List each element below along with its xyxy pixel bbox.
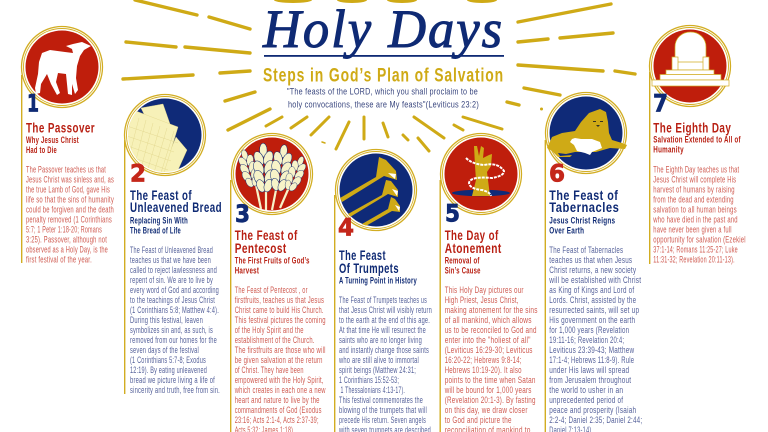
subheading: Replacing Sin With: [130, 216, 188, 226]
body text: His government on the earth: [549, 315, 635, 325]
number 7: 7: [653, 90, 668, 118]
body text: 17:1-4; Hebrews 11:8-9). Rule: [549, 355, 634, 365]
panel: The Feast of Trumpets: [335, 150, 432, 432]
body text: peace and prosperity (Isaiah: [549, 405, 636, 415]
title: Holy Days: Holy Days: [262, 0, 504, 59]
body text: 3:25). Passover, although not: [26, 234, 107, 244]
body text: to the earth at the end of this age.: [339, 315, 430, 325]
sun rays: [123, 0, 635, 151]
body text: [549, 245, 642, 432]
body text: This festival pictures the coming: [235, 315, 326, 325]
icon: unleavened bread: [115, 94, 206, 178]
number 4: 4: [338, 214, 354, 242]
body text: that Jesus Christ will visibly return: [339, 305, 432, 315]
heading: Of Trumpets: [339, 261, 399, 276]
heading: Unleavened Bread: [130, 200, 222, 215]
subheading: [445, 256, 481, 276]
panel: The Feast of Unleavened Bread: [115, 94, 222, 395]
body text: which creates in each one a new: [234, 385, 326, 395]
body text: teaches us that when Jesus: [549, 255, 633, 265]
panel: The Day of Atonement: [440, 134, 538, 432]
body text: 12:19). By eating unleavened: [130, 365, 207, 375]
number 1: 1: [27, 90, 39, 118]
subheading: The Bread of Life: [130, 226, 181, 236]
body text: will be established with Christ: [549, 275, 641, 285]
body text: heart and nature to live by the: [235, 395, 320, 405]
body text: first festival of the year.: [26, 254, 92, 264]
body text: The firstfruits are those who will: [235, 345, 326, 355]
body text: will be bound for 1,000 years: [444, 385, 532, 395]
body text: of all mankind, which allows: [445, 315, 532, 325]
body text: the true Lamb of God, gave His: [26, 184, 110, 194]
body text: [444, 285, 538, 432]
body text: enter into the "holiest of all": [445, 335, 531, 345]
body text: life so that the sins of humanity: [26, 194, 114, 204]
body text: on this day, we draw closer: [445, 405, 528, 415]
body text: [653, 164, 746, 264]
body text: empowered with the Holy Spirit,: [235, 375, 324, 385]
scripture quote: holy convocations, these are My feasts"(Leviticus 23:2): [288, 100, 479, 110]
body text: resurrected saints, will set up: [549, 305, 639, 315]
panel: The Eighth Day: [650, 26, 746, 264]
heading: Tabernacles: [549, 200, 619, 215]
icon: hand breaking chains: [440, 134, 522, 214]
body text: sincerity and truth, free from sin.: [130, 385, 220, 395]
icon: throne: [650, 26, 730, 106]
heading: The Feast of: [549, 188, 618, 203]
subheading: Jesus Christ Reigns: [549, 216, 615, 226]
body text: establishment of the Church.: [235, 335, 315, 345]
scripture quote: [287, 86, 479, 110]
body text: the world to usher in an: [549, 385, 623, 395]
subheading: [26, 135, 79, 155]
subheading: Removal of: [445, 256, 480, 266]
subheading: Had to Die: [26, 145, 57, 155]
body text: who are still alive to immortal: [338, 355, 419, 365]
number 5: 5: [445, 200, 460, 228]
heading: [549, 188, 619, 215]
body text: (1 Corinthians 5:8; Matthew 4:4).: [130, 305, 219, 315]
body text: could be forgiven and the death: [26, 204, 114, 214]
heading: [235, 228, 298, 256]
number 2: 2: [130, 160, 146, 188]
body text: (Revelation 20:1-3). By fasting: [445, 395, 536, 405]
panel: The Feast of Tabernacles: [545, 92, 642, 432]
body text: precede His return. Seven angels: [339, 415, 426, 425]
body text: under His laws will spread: [549, 365, 629, 375]
body text: firstfruits, teaches us that Jesus: [235, 295, 324, 305]
subheading: Humanity: [653, 144, 684, 154]
number 3: 3: [235, 200, 250, 228]
body text: to God and picture the: [445, 415, 512, 425]
body text: [234, 285, 326, 432]
body text: every word of God and according: [130, 285, 219, 295]
body text: At that time He will resurrect the: [339, 325, 426, 335]
panel: The Passover: [22, 26, 114, 264]
body text: The Feast of Pentecost , or: [235, 285, 308, 295]
heading: Atonement: [445, 241, 502, 256]
heading: Pentecost: [235, 241, 287, 256]
body text: 2:2-4; Daniel 2:35; Daniel 2:44;: [549, 415, 642, 425]
subtitle: Steps in God’s Plan of Salvation: [263, 66, 504, 86]
body text: blowing of the trumpets that will: [339, 405, 427, 415]
heading: The Feast of: [130, 188, 192, 203]
body text: called to reject lawlessness and: [130, 265, 217, 275]
body text: commandments of God (Exodus: [235, 405, 322, 415]
subheading: [130, 216, 188, 236]
body text: symbolizes sin and, as such, is: [130, 325, 213, 335]
body text: Jesus Christ was sinless and, as: [26, 174, 114, 184]
scripture quote: "The feasts of the LORD, which you shall proclaim to be: [287, 86, 478, 98]
heading: The Day of: [445, 228, 499, 243]
body text: for 1,000 years (Revelation: [549, 325, 629, 335]
body text: [26, 164, 114, 264]
icon: wheat: [232, 134, 312, 214]
icon: trumpets: [336, 150, 416, 230]
body text: seven days of the festival: [130, 345, 199, 355]
body text: Christ returns, a new society: [549, 265, 637, 275]
icon: lion and lamb: [546, 92, 627, 174]
body text: During this festival, leaven: [130, 315, 203, 325]
body text: [338, 295, 432, 432]
body text: making atonement for the sins: [445, 305, 538, 315]
subheading: Over Earth: [549, 226, 584, 236]
body text: This Holy Day pictures our: [445, 285, 524, 295]
subheading: Sin’s Cause: [445, 266, 481, 276]
body text: The Passover teaches us that: [26, 164, 106, 174]
body text: High Priest, Jesus Christ,: [445, 295, 519, 305]
body text: Lords. Christ, assisted by the: [549, 295, 636, 305]
heading: [339, 248, 399, 276]
body text: This festival commemorates the: [339, 395, 423, 405]
body text: (Leviticus 16:29-30; Leviticus: [445, 345, 533, 355]
icon: lamb: [22, 26, 102, 108]
heading: [130, 188, 222, 215]
panel: The Feast of Pentecost: [231, 134, 326, 432]
body text: 19:11-16; Revelation 20:4;: [549, 335, 624, 345]
body text: repent of sin. We are to live by: [130, 275, 213, 285]
subheading: Why Jesus Christ: [26, 135, 79, 145]
subheading: Harvest: [235, 266, 259, 276]
number 6: 6: [549, 160, 565, 188]
body text: be given salvation at the return: [235, 355, 323, 365]
body text: (1 Corinthians 5:7-8; Exodus: [130, 355, 206, 365]
heading: The Feast of: [235, 228, 298, 243]
body text: 16:20-22; Hebrews 9:8-14;: [445, 355, 522, 365]
body text: 5:7; 1 Peter 1:18-20; Romans: [26, 224, 102, 234]
body text: The Feast of Trumpets teaches us: [339, 295, 427, 305]
body text: 1 Thessalonians 4:13-17).: [340, 385, 405, 395]
heading: The Feast: [339, 248, 386, 263]
body text: Christ came to build His Church.: [235, 305, 324, 315]
subheading: [653, 134, 741, 154]
body text: Leviticus 23:39-43; Matthew: [549, 345, 635, 355]
body text: spirit beings (Matthew 24:31;: [339, 365, 416, 375]
body text: from Jerusalem throughout: [549, 375, 631, 385]
subheading: [235, 256, 310, 276]
body text: observed as a Holy Day, is the: [26, 244, 108, 254]
body text: removed from our homes for the: [130, 335, 217, 345]
body text: of the Holy Spirit and the: [235, 325, 304, 335]
body text: The Feast of Unleavened Bread: [130, 245, 213, 255]
body text: as King of Kings and Lord of: [549, 285, 634, 295]
body text: points to the time when Satan: [445, 375, 536, 385]
body text: to the teachings of Jesus Christ: [130, 295, 215, 305]
body text: 1 Corinthians 15:52-53;: [339, 375, 399, 385]
body text: teaches us that we have been: [130, 255, 211, 265]
body text: unprecedented period of: [549, 395, 623, 405]
body text: penalty removed (1 Corinthians: [26, 214, 112, 224]
body text: of Christ. They have been: [235, 365, 304, 375]
body text: 23:16; Acts 2:1-4, Acts 2:37-39;: [235, 415, 319, 425]
heading: The Eighth Day: [653, 120, 731, 136]
body text: us to be reconciled to God and: [445, 325, 537, 335]
body text: bread we picture living a life of: [130, 375, 215, 385]
subheading: The First Fruits of God’s: [235, 256, 310, 266]
heading: [445, 228, 502, 256]
body text: [130, 245, 220, 395]
body text: and instantly change those saints: [339, 345, 429, 355]
subheading: A Turning Point in History: [339, 276, 417, 286]
body text: saints who are no longer living: [339, 335, 422, 345]
subheading: [549, 216, 615, 236]
heading: The Passover: [26, 120, 95, 136]
body text: The Feast of Tabernacles: [549, 245, 624, 255]
body text: Hebrews 10:19-20). It also: [445, 365, 522, 375]
